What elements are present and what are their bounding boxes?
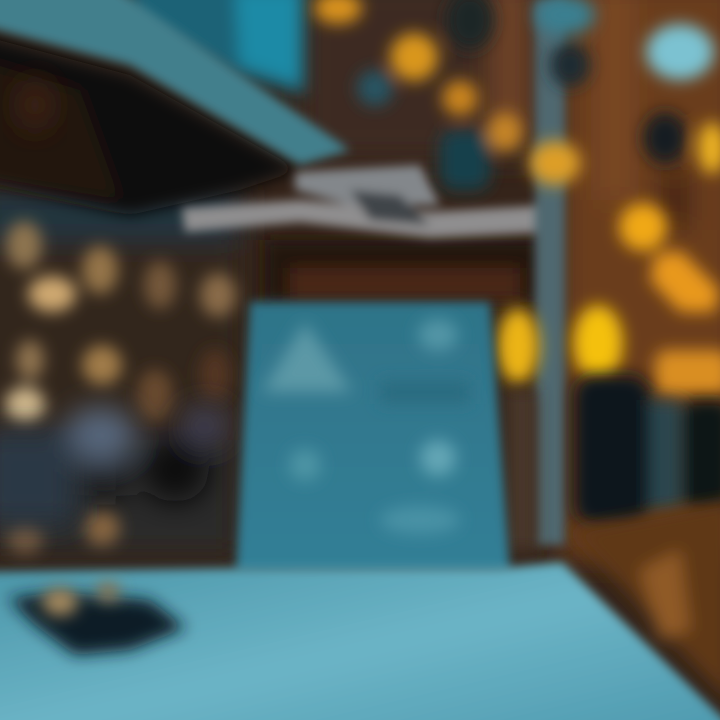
left shelf lights [5, 221, 236, 554]
light teal floor [0, 562, 720, 720]
panel triangle icon [262, 322, 352, 392]
teal diagonal beam [0, 0, 350, 165]
wooden floor on right [570, 500, 720, 700]
grey hanging banner [182, 165, 552, 238]
seated figures on left [0, 405, 229, 525]
warm lights top [314, 0, 595, 190]
dark ceiling wedge [0, 35, 300, 215]
grey vertical pillar [535, 0, 565, 545]
dim ceiling lamp [17, 79, 53, 131]
dark floor mat [8, 592, 186, 655]
left dark shelving [0, 185, 245, 560]
right brown wall [300, 0, 720, 560]
dark figures on right [508, 375, 720, 550]
warm objects on mat [42, 582, 120, 616]
panel glows [289, 319, 470, 534]
central teal panel [236, 302, 510, 572]
top teal ceiling area [130, 0, 305, 95]
dark band under banner [265, 240, 540, 302]
right wall lights [497, 24, 720, 395]
